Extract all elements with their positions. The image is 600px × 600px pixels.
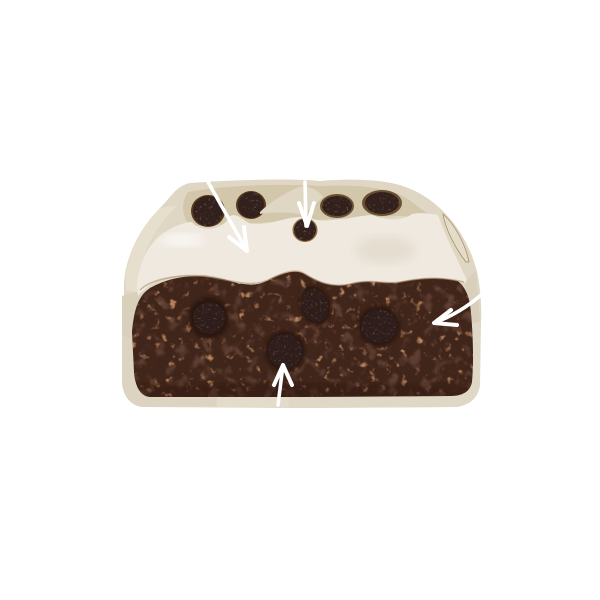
chocolate balls [188, 192, 402, 372]
illustration: protein bar cross-section with arrows [122, 180, 482, 408]
almond slice top [260, 186, 323, 214]
arrow: top left [208, 182, 247, 251]
chocolate crisp base layer [132, 272, 474, 397]
white cream layer [137, 213, 466, 296]
chocolate balls behind cream [191, 190, 402, 227]
almond sliver right [443, 214, 469, 262]
arrow: bottom [274, 365, 292, 405]
cream shading [140, 234, 464, 290]
arrow: top centre [299, 182, 314, 226]
arrow: right [434, 295, 481, 325]
outer coating shell [122, 180, 481, 408]
